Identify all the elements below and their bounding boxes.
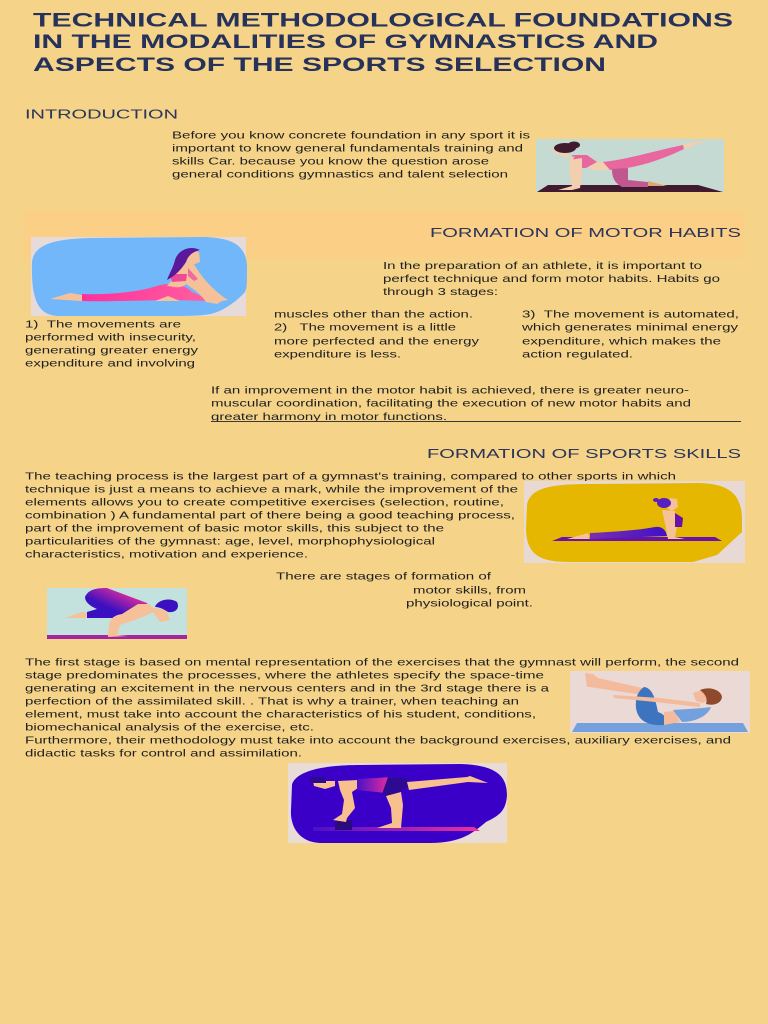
text block: teaching process (25, 472, 676, 560)
icon: kneeling leg raise yoga pose (536, 139, 724, 192)
text block: stage 2: more perfected and the energy (274, 336, 480, 348)
text block: first stage: generating an excitement in the nervous centers and in the 3rd stage there is a (25, 684, 549, 694)
text block: stage 3: action regulated. (522, 350, 633, 360)
text block: teaching process: combination ) A fundamental part of there being a good teaching process, (25, 510, 515, 522)
text block: stage 3: 3) The movement is automated, (522, 310, 739, 320)
text block: stages of formation: physiological point. (406, 598, 533, 610)
text block: stage 1: generating greater energy (25, 346, 199, 356)
title (33, 10, 733, 76)
text block: first stage: stage predominates the processes, where the athletes specify the space-time (25, 670, 544, 682)
text block: first stage: biomechanical analysis of the exercise, etc. (25, 722, 314, 734)
text block: motor habit improvement: greater harmony in motor functions. (211, 412, 447, 423)
text block: stage 1 (25, 320, 199, 370)
text block: introduction (172, 130, 530, 180)
text block: motor habits intro: perfect technique and form motor habits. Habits go (383, 274, 720, 285)
text block: first stage: didactic tasks for control and assimilation. (25, 748, 302, 760)
icon: crow yoga pose (47, 588, 187, 639)
text block: teaching process: The teaching process is the largest part of a gymnast's training, compared to other sports in which (25, 472, 676, 482)
icon: cobra yoga pose (524, 481, 745, 563)
text block: motor habit improvement (211, 386, 691, 423)
text block: first stage: perfection of the assimilated skill. . That is why a trainer, when teaching an (25, 696, 519, 708)
panel: motor habits banner (24, 211, 744, 258)
text block: stages of formation: There are stages of formation of (276, 572, 491, 582)
text block: stage 3: expenditure, which makes the (522, 336, 721, 348)
text block: teaching process: elements allows you to create competitive exercises (selection, routine, (25, 498, 504, 508)
title: TECHNICAL METHODOLOGICAL FOUNDATIONS (33, 10, 733, 32)
text block: introduction: important to know general fundamentals training and (172, 144, 523, 154)
title: ASPECTS OF THE SPORTS SELECTION (33, 55, 606, 76)
text block: stages of formation: motor skills, from (413, 586, 526, 596)
text block: stage 2: muscles other than the action. (274, 310, 473, 320)
text block: stage 2: 2) The movement is a little (274, 322, 456, 334)
text block: motor habits intro: In the preparation of an athlete, it is important to (383, 261, 702, 272)
text block: stage 2 (274, 310, 480, 360)
text block: stage 1: performed with insecurity, (25, 332, 196, 344)
text block: introduction: Before you know concrete foundation in any sport it is (172, 130, 530, 142)
icon: seated stretch yoga pose (31, 237, 247, 316)
icon: boat pose (570, 671, 750, 733)
text block: teaching process: particularities of the gymnast: age, level, morphophysiological (25, 536, 435, 548)
text block: first stage: element, must take into account the characteristics of his student, conditions, (25, 710, 536, 720)
text block: stage 2: expenditure is less. (274, 350, 401, 360)
text block: introduction: general conditions gymnastics and talent selection (172, 170, 508, 180)
text block: stage 1: 1) The movements are (25, 320, 181, 330)
icon: warrior balance pose (288, 763, 507, 843)
text block: stage 3: which generates minimal energy (521, 322, 739, 334)
text block: first stage (25, 658, 739, 760)
text block: stages of formation (276, 572, 533, 610)
text block: motor habits intro: through 3 stages: (383, 287, 498, 298)
text block: stage 1: expenditure and involving (25, 358, 195, 370)
text block: first stage: Furthermore, their methodology must take into account the background exercises, auxiliary exercises, and (25, 736, 731, 746)
text block: teaching process: part of the improvement of basic motor skills, this subject to the (25, 524, 444, 534)
title: IN THE MODALITIES OF GYMNASTICS AND (33, 32, 658, 53)
text block: teaching process: technique is just a means to achieve a mark, while the improvement of the (25, 484, 518, 496)
heading: formation of motor habits: FORMATION OF MOTOR HABITS (430, 226, 741, 240)
text block: motor habit improvement: muscular coordination, facilitating the execution of new motor habits and (211, 398, 691, 410)
text block: motor habits intro (383, 261, 720, 298)
text block: introduction: skills Car. because you know the question arose (172, 156, 489, 168)
heading: introduction: INTRODUCTION (25, 108, 178, 122)
text block: teaching process: characteristics, motivation and experience. (25, 550, 308, 560)
text block: stage 3 (521, 310, 739, 360)
heading: formation of sports skills: FORMATION OF SPORTS SKILLS (427, 447, 741, 461)
text block: motor habit improvement: If an improvement in the motor habit is achieved, there is greater neuro- (211, 386, 689, 396)
text block: first stage: The first stage is based on mental representation of the exercises that the gymnast will perform, the second (25, 658, 739, 668)
